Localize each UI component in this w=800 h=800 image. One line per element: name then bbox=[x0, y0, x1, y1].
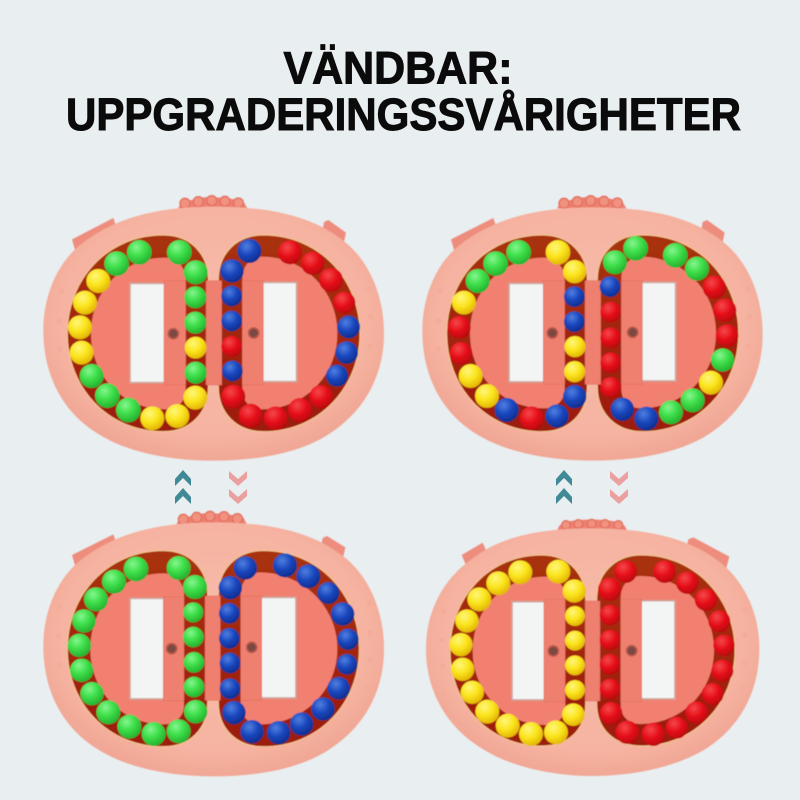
puzzle toy: top left bbox=[43, 196, 384, 461]
double chevrons: right pair bbox=[556, 470, 628, 504]
puzzle toy: top right bbox=[422, 196, 763, 461]
title: UPPGRADERINGSSVÅRIGHETER bbox=[66, 89, 741, 140]
double chevrons: left pair bbox=[175, 470, 247, 504]
title: VÄNDBAR: bbox=[284, 42, 512, 94]
title bbox=[66, 42, 741, 140]
puzzle toy: bottom left bbox=[43, 511, 384, 776]
puzzle toy: bottom right bbox=[426, 519, 759, 776]
